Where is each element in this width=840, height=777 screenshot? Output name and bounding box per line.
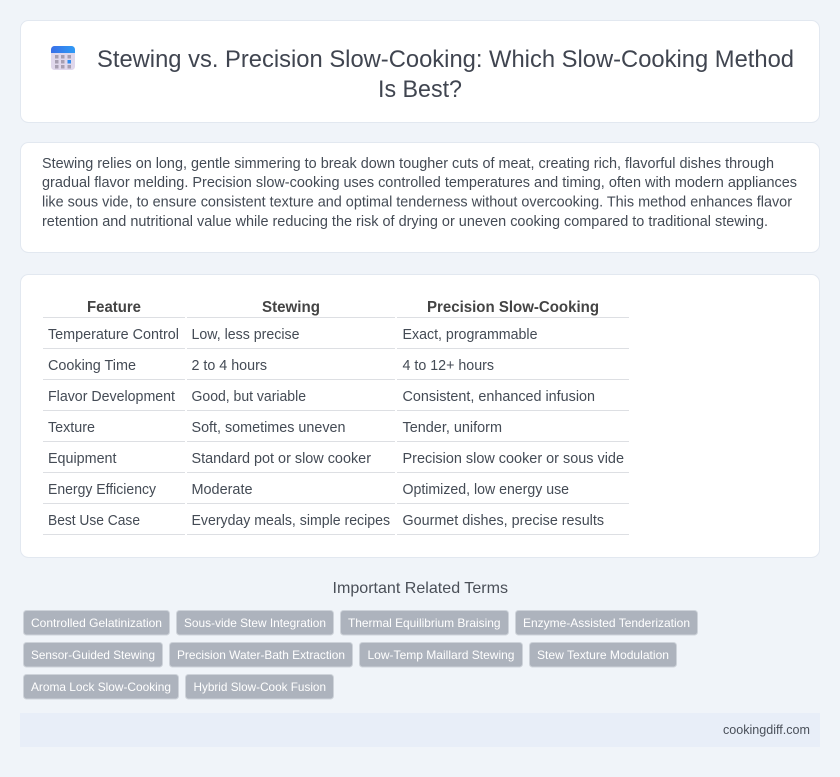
- table header: Precision Slow-Cooking: [427, 299, 599, 316]
- row: cooking time: 2 to 4 hours: [192, 358, 267, 374]
- row: energy efficiency: Optimized, low energy use: [402, 482, 569, 498]
- row: energy efficiency: Energy Efficiency: [48, 482, 157, 498]
- text block: intro: retention and nutritional value while reducing the risk of drying or uneven cooking compared to traditional stewing.: [42, 214, 768, 230]
- table header: Stewing: [262, 299, 320, 316]
- row: temperature control: [48, 327, 538, 343]
- tags: related terms: Stew Texture Modulation: [537, 648, 669, 662]
- tags: related terms: Precision Water-Bath Extraction: [177, 648, 345, 662]
- tags: related terms: Enzyme-Assisted Tenderization: [523, 616, 690, 630]
- row: energy efficiency: Moderate: [192, 482, 252, 498]
- heading: related terms: Important Related Terms: [332, 580, 508, 597]
- row: cooking time: 4 to 12+ hours: [402, 358, 494, 374]
- row: flavor development: Consistent, enhanced infusion: [402, 389, 595, 405]
- panel: title header: [20, 20, 820, 122]
- text block: intro: [42, 156, 797, 230]
- tags: related terms: Aroma Lock Slow-Cooking: [31, 680, 171, 694]
- row: best use case: Everyday meals, simple recipes: [192, 513, 390, 529]
- row: temperature control: Low, less precise: [192, 327, 300, 343]
- row: flavor development: Good, but variable: [192, 389, 306, 405]
- row: equipment: [48, 451, 624, 467]
- row: texture: Tender, uniform: [402, 420, 502, 436]
- row: equipment: Equipment: [48, 451, 116, 467]
- row: equipment: Precision slow cooker or sous vide: [402, 451, 624, 467]
- text block: intro: Stewing relies on long, gentle simmering to break down tougher cuts of meat, creating rich, flavorful dishes through: [42, 156, 774, 172]
- footer: cookingdiff.com: [723, 723, 810, 737]
- row: cooking time: Cooking Time: [48, 358, 136, 374]
- row: temperature control: Temperature Control: [48, 327, 179, 343]
- row: texture: [48, 420, 502, 436]
- row: texture: Texture: [48, 420, 95, 436]
- tags: related terms: Sous-vide Stew Integration: [184, 616, 326, 630]
- row: flavor development: [48, 389, 595, 405]
- row: best use case: Gourmet dishes, precise results: [402, 513, 604, 529]
- table header: Feature: [87, 299, 141, 316]
- row: energy efficiency: [48, 482, 569, 498]
- text block: intro: like sous vide, to ensure consistent texture and optimal tenderness without overcooking. This method enhances flavor: [42, 194, 792, 210]
- title: [97, 46, 794, 103]
- tags: related terms: Hybrid Slow-Cook Fusion: [194, 680, 326, 694]
- footer: [20, 713, 820, 747]
- tags: related terms: Controlled Gelatinization: [31, 616, 162, 630]
- row: equipment: Standard pot or slow cooker: [192, 451, 371, 467]
- panel: intro paragraph: [20, 142, 820, 252]
- row: texture: Soft, sometimes uneven: [192, 420, 346, 436]
- tags: related terms: Thermal Equilibrium Braising: [348, 616, 500, 630]
- table header: [87, 299, 599, 316]
- row: best use case: Best Use Case: [48, 513, 140, 529]
- row: flavor development: Flavor Development: [48, 389, 175, 405]
- row: temperature control: Exact, programmable: [402, 327, 538, 343]
- tags: related terms: Sensor-Guided Stewing: [31, 648, 155, 662]
- title: Is Best?: [378, 76, 462, 103]
- title: Stewing vs. Precision Slow-Cooking: Which Slow-Cooking Method: [97, 46, 794, 73]
- row: cooking time: [48, 358, 494, 374]
- tags: related terms: [24, 610, 698, 699]
- icon: calendar: [51, 46, 75, 70]
- row: best use case: [48, 513, 604, 529]
- panel: comparison table: [20, 274, 820, 558]
- tags: related terms: Low-Temp Maillard Stewing: [368, 648, 514, 662]
- text block: intro: gradual flavor melding. Precision slow-cooking uses controlled temperatures and timing, often with modern appliances: [42, 175, 797, 191]
